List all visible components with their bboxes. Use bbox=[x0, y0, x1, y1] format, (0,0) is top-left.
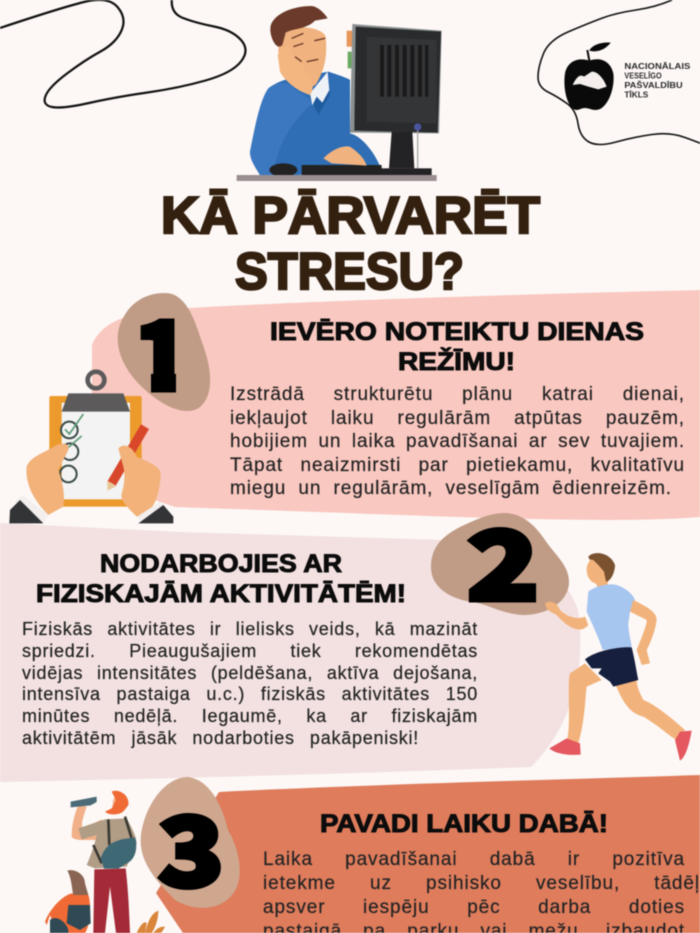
text block: step 1: Izstrādā strukturētu plānu katrai dienai, bbox=[230, 384, 685, 405]
text block: step 2 bbox=[21, 619, 478, 749]
panel 1 background and number: REŽĪMU! bbox=[398, 346, 515, 376]
text block: step 2: vidējas intensitātes (peldēšana, aktīva dejošana, bbox=[22, 663, 478, 683]
text block: step 3: ietekme uz psihisko veselību, tādēļ bbox=[263, 873, 700, 894]
text block: step 3 bbox=[262, 849, 700, 933]
decorative curve: top right around logo bbox=[536, 0, 700, 146]
text block: step 1 bbox=[230, 384, 685, 499]
text block: step 2: aktivitātēm jāsāk nodarboties pakāpeniski! bbox=[22, 728, 419, 748]
panel 2 background and number: 2 bbox=[467, 491, 539, 628]
text block: step 1: Tāpat neaizmirsti par pietiekamu, kvalitatīvu bbox=[230, 454, 685, 476]
logo text bbox=[624, 62, 691, 99]
logo: apple and organisation name bbox=[564, 42, 691, 111]
text block: step 3: apsver iespēju pēc darba doties bbox=[263, 897, 685, 918]
logo text: PAŠVALDĪBU bbox=[624, 81, 683, 90]
icon: clipboard held by hands bbox=[8, 368, 174, 524]
panel: step 2 physical activity bbox=[0, 491, 692, 782]
panel 1 background and number: 1 bbox=[134, 281, 190, 418]
panel: step 1 daily routine bbox=[8, 290, 700, 524]
panel 2 background and number bbox=[0, 491, 580, 782]
text block: step 2: minūtes nedēļā. Iegaumē, ka ar fiziskajām bbox=[22, 706, 478, 726]
panel: step 3 time in nature bbox=[44, 774, 700, 933]
title: STRESU? bbox=[235, 243, 464, 301]
title: KĀ PĀRVARĒT bbox=[161, 187, 540, 245]
icon: apple bbox=[564, 42, 614, 110]
panel 2 background and number: NODARBOJIES AR bbox=[100, 550, 342, 578]
text block: step 2: intensīva pastaiga u.c.) fiziskās aktivitātes 150 bbox=[22, 684, 478, 704]
panel 3 background and number bbox=[140, 774, 700, 933]
text block: step 2: Fiziskās aktivitātes ir lielisks veids, kā mazināt bbox=[22, 619, 478, 639]
panel 1 background and number: IEVĒRO NOTEIKTU DIENAS bbox=[270, 318, 644, 346]
logo text: TĪKLS bbox=[624, 90, 649, 99]
icon: hikers bbox=[44, 790, 166, 933]
text block: step 3: Laika pavadīšanai dabā ir pozitīva bbox=[263, 849, 685, 870]
text block: step 1: iekļaujot laiku regulārām atpūtas pauzēm, bbox=[230, 408, 685, 428]
text block: step 1: hobijiem un laika pavadīšanai ar sev tuvajiem. bbox=[230, 431, 685, 452]
decorative curve: top left bbox=[0, 0, 248, 110]
logo text: VESELĪGO bbox=[624, 72, 662, 81]
text block: step 2: spriedzi. Pieaugušajiem tiek rekomendētas bbox=[22, 641, 478, 661]
text block: step 1: miegu un regulārām, veselīgām ēdienreizēm. bbox=[230, 478, 672, 499]
panel 1 background and number bbox=[92, 290, 700, 520]
illustration: tired man at computer bbox=[236, 5, 442, 182]
logo text: NACIONĀLAIS bbox=[624, 62, 691, 71]
panel 3 background and number: 3 bbox=[158, 777, 224, 914]
title bbox=[161, 187, 542, 301]
icon: runner bbox=[544, 552, 692, 761]
panel 3 background and number: PAVADI LAIKU DABĀ! bbox=[320, 810, 608, 838]
panel 2 background and number: FIZISKAJĀM AKTIVITĀTĒM! bbox=[36, 580, 406, 608]
